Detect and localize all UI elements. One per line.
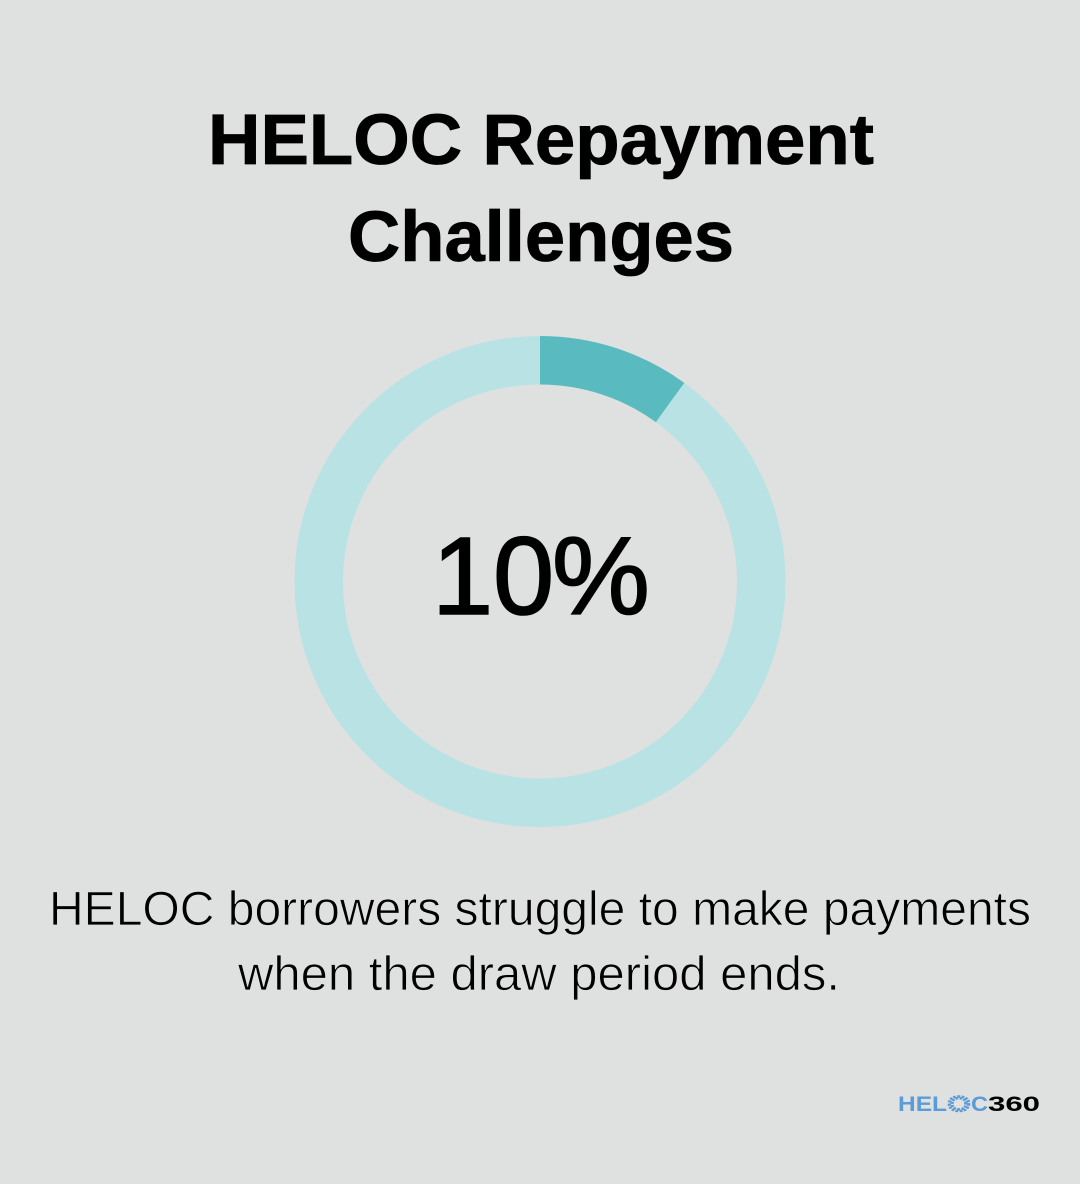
logo: HELOC360: 360 (988, 1093, 1040, 1116)
description text (49, 883, 1031, 1001)
donut highlighted segment (540, 336, 684, 422)
description text: when the draw period ends. (237, 948, 840, 1001)
center percentage: 10% (432, 515, 650, 638)
donut track (319, 360, 761, 803)
title (208, 101, 874, 277)
logo: HELOC360: C (971, 1093, 988, 1116)
title: HELOC Repayment (208, 101, 874, 180)
donut chart: 10% (319, 336, 761, 803)
title: Challenges (348, 198, 734, 277)
logo: HELOC360 (898, 1093, 1040, 1116)
description text: HELOC borrowers struggle to make payments (49, 883, 1031, 936)
logo: HELOC360: HEL (898, 1093, 947, 1116)
logo: HELOC360: O (948, 1093, 970, 1116)
